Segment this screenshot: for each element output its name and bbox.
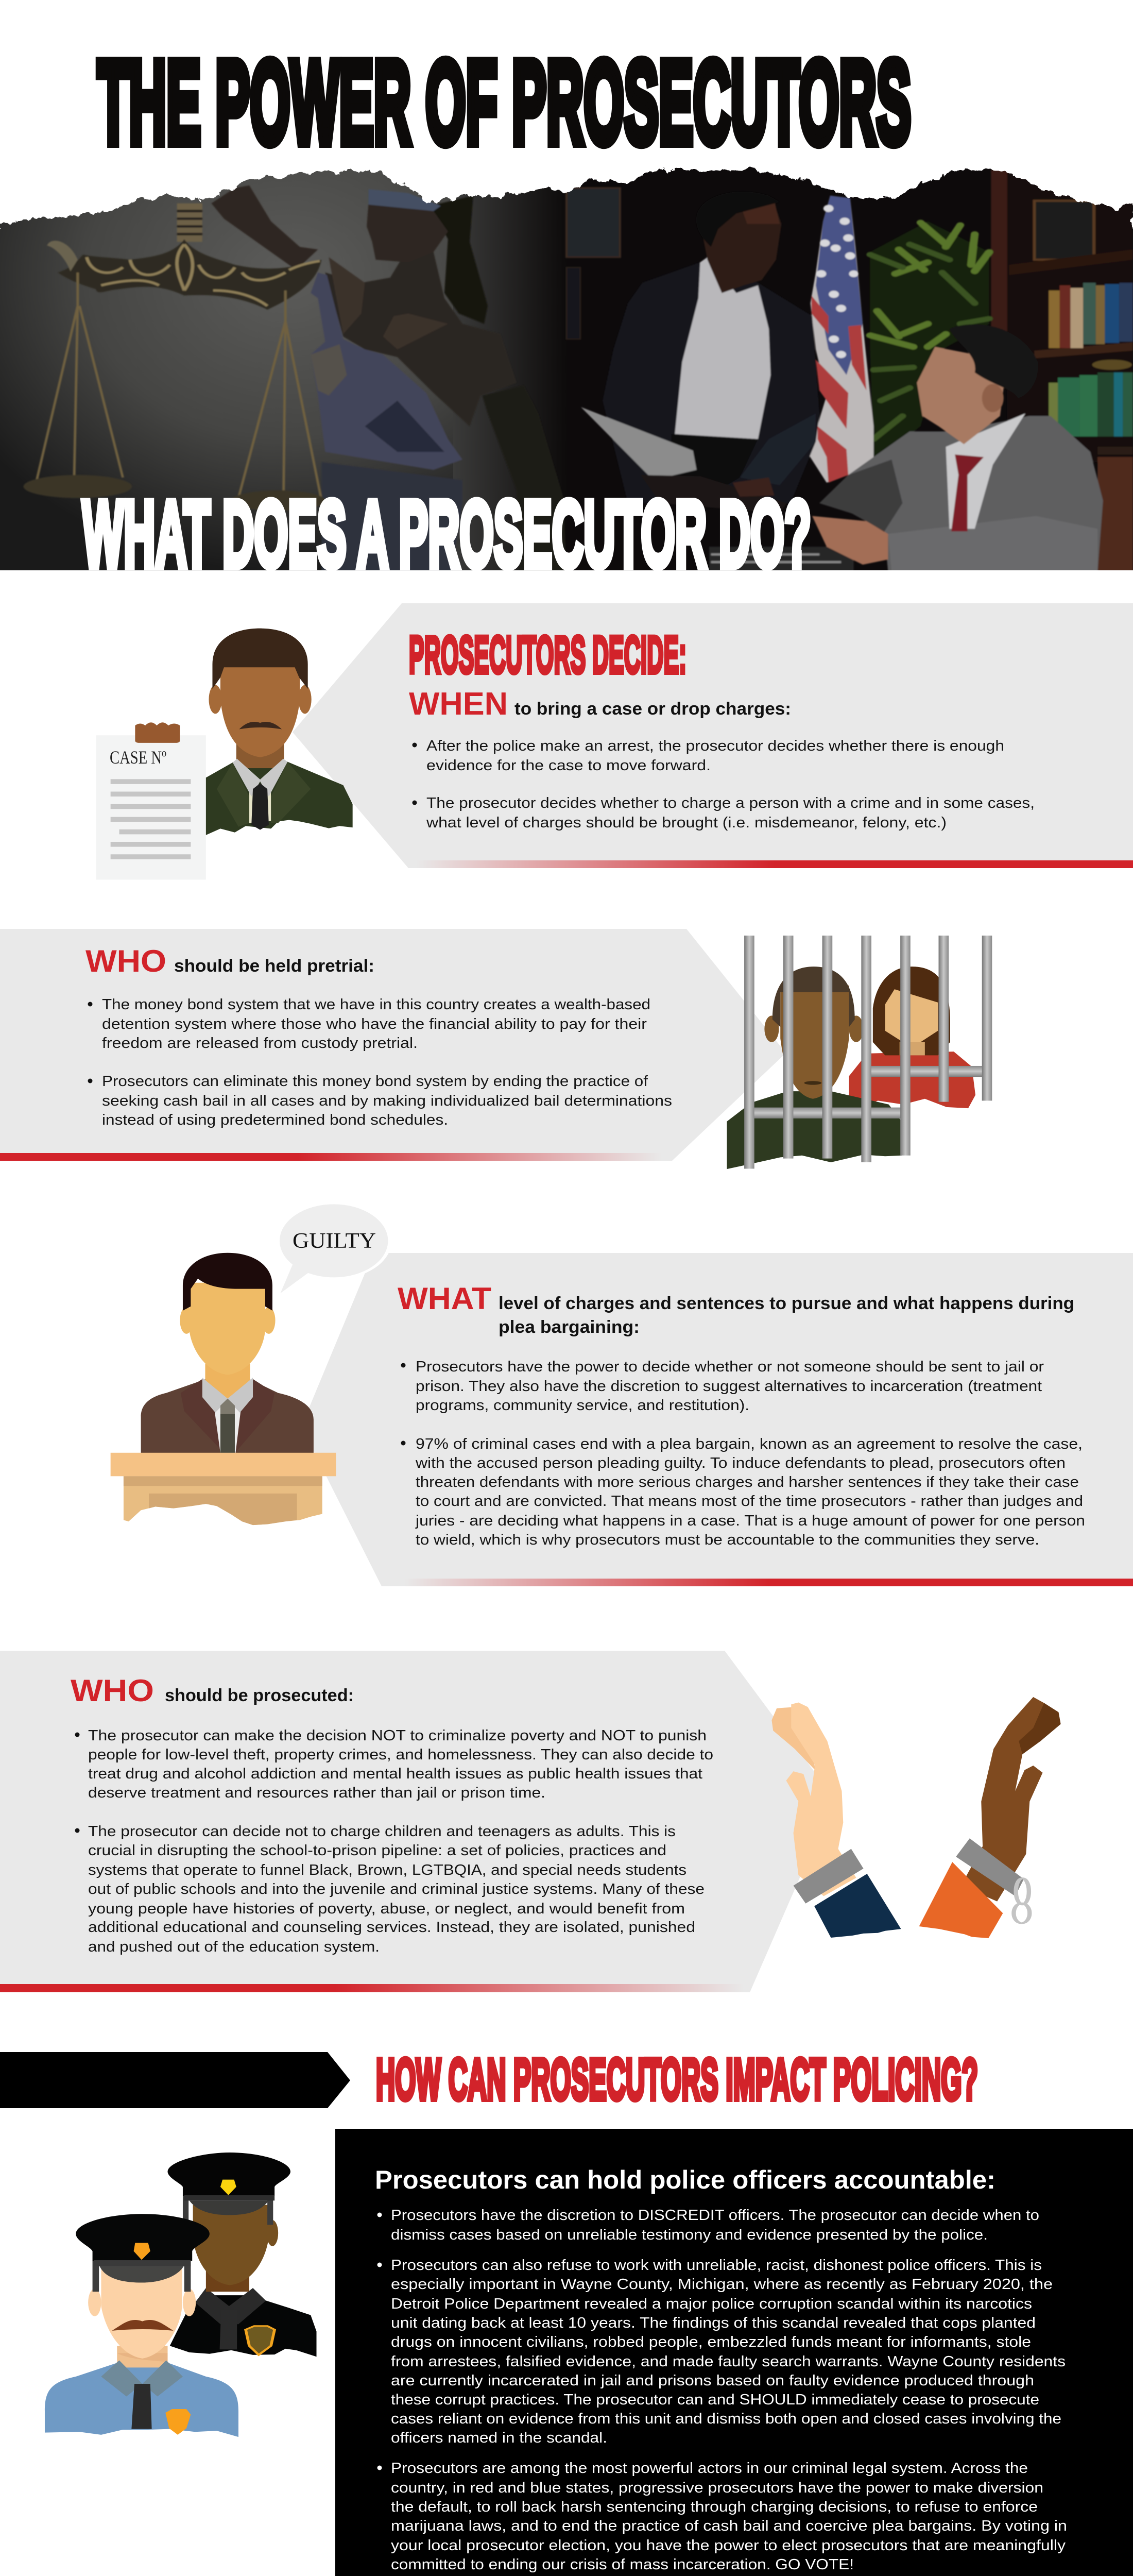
subheading: when xyxy=(409,686,791,722)
subheading: who: should be prosecuted: xyxy=(165,1686,354,1705)
woman attorney xyxy=(581,192,819,514)
bullet text: marijuana laws, and to end the practice of cash bail and coercive plea bargains. By voting in xyxy=(391,2518,1067,2534)
bullet text xyxy=(75,1727,713,1955)
bullet text: The prosecutor decides whether to charge a person with a crime and in some cases, xyxy=(426,795,1035,811)
bullet text: cases reliant on evidence from this unit and dismiss both open and closed cases involving the xyxy=(391,2411,1061,2427)
icon: two people behind jail bars xyxy=(727,936,992,1169)
seated man in gray suit xyxy=(812,324,1133,572)
bullet text: the default, to roll back harsh sentencing through charging decisions, to refuse to enforce xyxy=(391,2499,1038,2515)
bullet text: drugs on innocent civilians, robbed people, embezzled funds meant for informants, stole xyxy=(391,2334,1031,2350)
bullet text: country, in red and blue states, progressive prosecutors have the power to make diversion xyxy=(391,2480,1043,2496)
bullet text: crucial in disrupting the school-to-prison pipeline: a set of policies, practices and xyxy=(88,1842,666,1859)
bullet text: to wield, which is why prosecutors must be accountable to the communities they serve. xyxy=(416,1532,1039,1548)
icon: two police officers xyxy=(45,2153,317,2437)
bullet text: systems that operate to funnel Black, Brown, LGTBQIA, and special needs students xyxy=(88,1862,686,1878)
panel: who should be held pretrial xyxy=(0,929,786,1161)
subheading: what: level of charges and sentences to pursue and what happens during xyxy=(499,1294,1074,1313)
panel: prosecutors can hold police accountable xyxy=(335,2129,1133,2576)
subheading: what xyxy=(398,1281,1074,1337)
bullet text: Prosecutors have the power to decide whether or not someone should be sent to jail or xyxy=(416,1359,1044,1375)
panel background xyxy=(293,603,1133,868)
hero photo: justice statue and courtroom xyxy=(0,155,1133,572)
bullet text: threaten defendants with more serious charges and harsher sentences if they take their case xyxy=(416,1474,1079,1490)
icon: speaker at podium with guilty speech bubble xyxy=(111,1202,391,1525)
bullet text xyxy=(401,1359,1085,1548)
bookcase xyxy=(991,170,1133,462)
bullet text: The prosecutor can decide not to charge children and teenagers as adults. This is xyxy=(88,1823,676,1840)
bullet text: these corrupt practices. The prosecutor can and SHOULD immediately cease to prosecute xyxy=(391,2392,1039,2408)
bullet text: juries - are deciding what happens in a case. That is a huge amount of power for one person xyxy=(415,1513,1085,1529)
bullet text: additional educational and counseling services. Instead, they are isolated, punished xyxy=(88,1919,695,1936)
wall panels xyxy=(566,188,620,257)
bullet text: freedom are released from custody pretrial. xyxy=(102,1035,418,1052)
bullet text: young people have histories of poverty, abuse, or neglect, and would benefit from xyxy=(88,1901,685,1917)
icon: man holding case document xyxy=(96,629,353,879)
subheading: who xyxy=(71,1673,354,1708)
bullet text: especially important in Wayne County, Michigan, where as recently as February 2020, the xyxy=(391,2276,1053,2293)
bullet text: evidence for the case to move forward. xyxy=(426,757,711,774)
bullet text: detention system where those who have the financial ability to pay for their xyxy=(102,1016,647,1032)
torso xyxy=(325,252,517,426)
bullet text: dismiss cases based on unreliable testimony and evidence presented by the police. xyxy=(391,2227,988,2243)
panel: prosecutors decide when xyxy=(293,603,1133,868)
bullet text: are currently incarcerated in jail and prisons based on faulty evidence produced through xyxy=(391,2372,1034,2389)
bullet text: Detroit Police Department revealed a major police corruption scandal within its narcotics xyxy=(391,2296,1032,2312)
statue raised arm and far arm xyxy=(211,185,318,270)
bullet text xyxy=(412,738,1035,831)
skirt xyxy=(321,462,462,572)
bullet text: The prosecutor can make the decision NOT to criminalize poverty and NOT to punish xyxy=(88,1727,707,1744)
bullet text: Prosecutors are among the most powerful actors in our criminal legal system. Across the xyxy=(391,2460,1028,2477)
bullet text: 97% of criminal cases end with a plea bargain, known as an agreement to resolve the case, xyxy=(416,1436,1083,1452)
courtroom scene xyxy=(566,170,1133,572)
bullet text: from arrestees, falsified evidence, and made faulty search warrants. Wayne County residents xyxy=(391,2353,1066,2370)
bubble label: GUILTY xyxy=(293,1229,376,1253)
panel: who should be prosecuted xyxy=(0,1651,834,1992)
panel background xyxy=(301,1253,1133,1586)
document label: CASE Nº xyxy=(110,747,166,768)
hair xyxy=(430,196,488,324)
panel heading: Prosecutors can hold police officers accountable: xyxy=(375,2165,995,2194)
subheading: who xyxy=(85,944,374,978)
subheading: what: WHAT xyxy=(398,1281,491,1316)
bullet text: people for low-level theft, property crimes, and homelessness. They can also decide to xyxy=(88,1747,713,1763)
bullet text: with the accused person pleading guilty. To induce defendants to plead, prosecutors often xyxy=(415,1455,1066,1471)
bullet text: unit dating back at least 10 years. The findings of this scandal revealed that cops planted xyxy=(391,2315,1036,2331)
balance beam xyxy=(58,239,321,310)
panel: prosecutors decide when: PROSECUTORS DECIDE: xyxy=(409,625,686,684)
american flag xyxy=(809,196,873,483)
panel background xyxy=(335,2129,1133,2576)
bullet text: and pushed out of the education system. xyxy=(88,1939,380,1955)
pans xyxy=(24,475,132,498)
plant xyxy=(870,221,989,462)
bullet text xyxy=(88,996,672,1128)
bullet text: Prosecutors can also refuse to work with unreliable, racist, dishonest police officers. This is xyxy=(391,2257,1042,2274)
balance column xyxy=(177,204,202,242)
red gradient bar xyxy=(405,1579,1133,1586)
bullet text: The money bond system that we have in this country creates a wealth-based xyxy=(102,996,650,1013)
red gradient bar xyxy=(416,860,1133,868)
panel background xyxy=(0,929,786,1161)
bullet text: After the police make an arrest, the prosecutor decides whether there is enough xyxy=(426,738,1004,754)
banner arrow xyxy=(0,2052,350,2108)
bullet text: what level of charges should be brought (i.e. misdemeanor, felony, etc.) xyxy=(426,815,947,831)
bullet text: committed to ending our crisis of mass incarceration. GO VOTE! xyxy=(391,2556,854,2573)
bullet text: seeking cash bail in all cases and by making individualized bail determinations xyxy=(102,1093,672,1109)
subheading: who: WHO xyxy=(85,944,166,978)
bullet text xyxy=(377,2207,1067,2573)
drape xyxy=(311,273,462,470)
bullet text: instead of using predetermined bond schedules. xyxy=(102,1112,448,1128)
bullet text: deserve treatment and resources rather than jail or prison time. xyxy=(88,1785,545,1801)
scales and statue xyxy=(24,185,566,572)
bullet text: your local prosecutor election, you have the power to elect prosecutors that are meaningfully xyxy=(391,2537,1066,2554)
subheading: when: WHEN xyxy=(409,686,508,722)
icon: two handcuffed raised hands xyxy=(771,1697,1061,1938)
panel: what level of charges xyxy=(301,1253,1133,1586)
chains xyxy=(36,273,321,501)
bullet text: Prosecutors have the discretion to DISCREDIT officers. The prosecutor can decide when to xyxy=(391,2207,1039,2224)
head xyxy=(367,204,448,262)
bullet text: treat drug and alcohol addiction and mental health issues as public health issues that xyxy=(88,1766,702,1782)
subheading: who: WHO xyxy=(71,1673,154,1708)
bullet text: to court and are convicted. That means most of the time prosecutors - rather than judges and xyxy=(416,1493,1083,1510)
subheading: what: plea bargaining: xyxy=(499,1317,640,1337)
red gradient bar xyxy=(0,1153,662,1161)
bullet text: out of public schools and into the juvenile and criminal justice systems. Many of these xyxy=(88,1881,705,1897)
blindfold xyxy=(369,189,441,211)
bullet text: prison. They also have the discretion to suggest alternatives to incarceration (treatment xyxy=(416,1378,1042,1395)
subheading: when: to bring a case or drop charges: xyxy=(514,699,791,719)
photo background xyxy=(0,155,1133,570)
panel background xyxy=(0,1651,834,1992)
bullet text: Prosecutors can eliminate this money bond system by ending the practice of xyxy=(102,1073,648,1090)
bullet text: officers named in the scandal. xyxy=(391,2430,607,2446)
desk items xyxy=(709,547,854,572)
red gradient bar xyxy=(0,1984,744,1992)
subheading: who: should be held pretrial: xyxy=(174,956,374,976)
bullet text: programs, community service, and restitution). xyxy=(416,1397,749,1414)
